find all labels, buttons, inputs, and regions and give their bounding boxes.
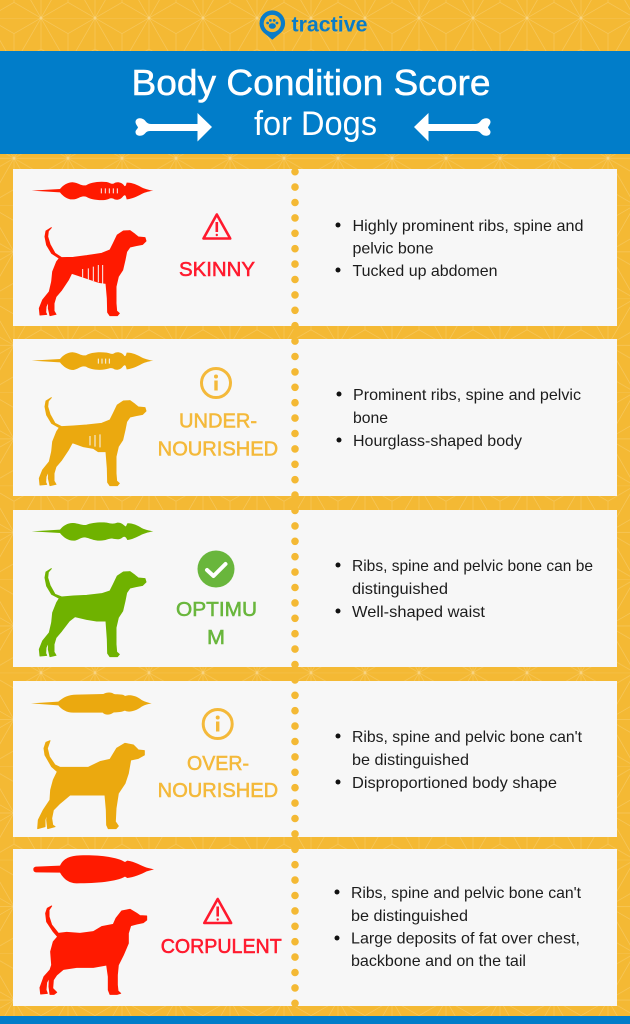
label: optimum <box>176 599 257 649</box>
icon: corpulent dog <box>40 906 147 994</box>
icon: bone arrow left <box>414 113 490 142</box>
logo: tractive <box>260 10 368 40</box>
icon: map pin with paw <box>260 10 285 40</box>
icon: warning triangle <box>204 214 230 238</box>
list: skinny description: Tucked up abdomen <box>352 263 498 280</box>
panel: skinny <box>13 169 617 326</box>
list: optimum description: Well-shaped waist <box>352 604 486 621</box>
wordmark: tractive <box>292 14 368 37</box>
icon: optimum top view <box>32 522 153 541</box>
label: optimum: M <box>207 627 225 649</box>
icon: under-nourished dog <box>39 398 146 486</box>
panel: over-nourished <box>13 681 617 837</box>
label: corpulent: CORPULENT <box>161 936 282 958</box>
label: over-nourished <box>158 753 278 802</box>
list: skinny description <box>336 218 584 280</box>
list: corpulent description: Ribs, spine and pelvic bone can't <box>351 885 582 902</box>
list: under-nourished description <box>336 387 581 450</box>
list: over-nourished description: be distinguished <box>352 752 469 769</box>
header band <box>0 51 630 154</box>
label: under-nourished: NOURISHED <box>158 439 278 461</box>
list: optimum description: distinguished <box>352 581 448 598</box>
icon: warning triangle <box>204 899 231 923</box>
list: over-nourished description <box>336 729 583 792</box>
panel: corpulent <box>13 849 617 1006</box>
list: skinny description: Highly prominent ribs, spine and <box>352 218 584 235</box>
icon: over-nourished top view <box>31 692 152 715</box>
list: over-nourished description: Ribs, spine and pelvic bone can't <box>352 729 583 746</box>
list: corpulent description: be distinguished <box>351 908 468 925</box>
list: skinny description: pelvic bone <box>352 240 434 258</box>
icon: under-nourished top view <box>32 352 153 370</box>
subtitle: for Dogs <box>254 105 377 143</box>
icon: info circle <box>203 710 232 738</box>
list: under-nourished description: bone <box>353 410 388 427</box>
label: under-nourished <box>158 411 278 461</box>
footer band <box>0 1016 630 1024</box>
list: under-nourished description: Prominent ribs, spine and pelvic <box>353 387 581 404</box>
panel: under-nourished <box>13 339 617 496</box>
list: over-nourished description: Disproportioned body shape <box>352 775 557 792</box>
icon: check circle <box>198 550 234 588</box>
icon: bone arrow right <box>136 113 212 142</box>
dotted divider <box>291 172 299 1004</box>
label: optimum: OPTIMU <box>176 599 257 621</box>
list: corpulent description: backbone and on the tail <box>351 953 526 970</box>
label: skinny: SKINNY <box>179 259 255 281</box>
title: Body Condition Score <box>132 62 490 103</box>
label: under-nourished: UNDER- <box>179 411 257 433</box>
list: corpulent description: Large deposits of fat over chest, <box>351 930 580 948</box>
icon: corpulent top view <box>33 855 154 883</box>
icon: info circle <box>202 368 230 398</box>
icon: skinny top view <box>32 182 153 200</box>
label: over-nourished: NOURISHED <box>158 780 278 802</box>
icon: over-nourished dog <box>38 741 144 829</box>
icon: optimum dog <box>39 569 146 657</box>
icon: skinny dog <box>39 228 146 316</box>
list: under-nourished description: Hourglass-shaped body <box>353 433 522 450</box>
list: optimum description <box>336 558 593 621</box>
list: corpulent description <box>334 885 582 970</box>
list: optimum description: Ribs, spine and pelvic bone can be <box>352 558 593 575</box>
label: over-nourished: OVER- <box>187 753 249 775</box>
panel: optimum <box>13 510 617 667</box>
